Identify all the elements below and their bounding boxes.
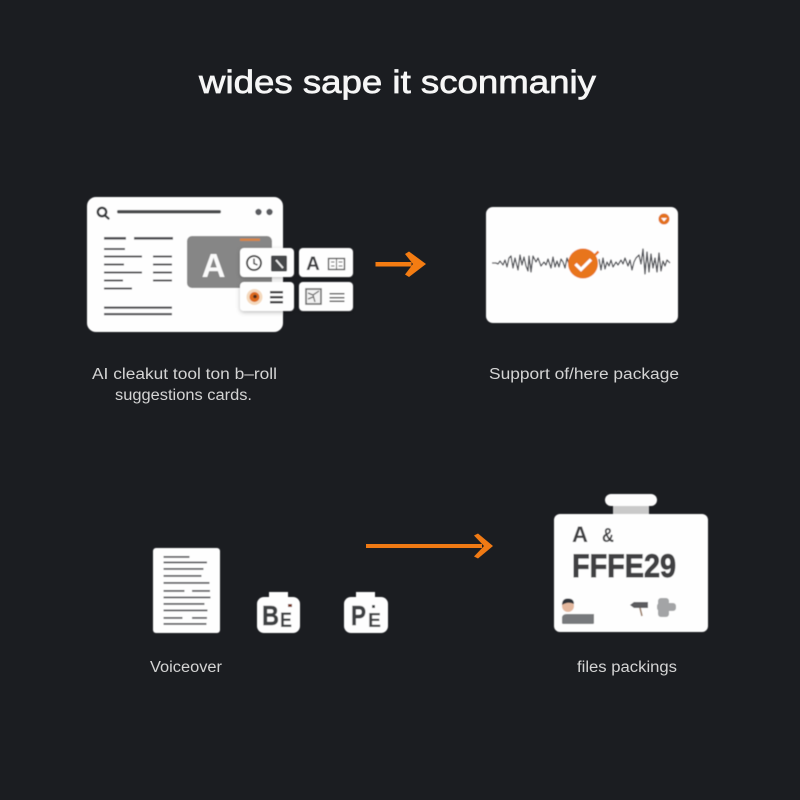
tag small letters: & (602, 525, 614, 547)
suggestion card: orange eye (240, 282, 294, 311)
icon: voiceover script document (153, 548, 220, 633)
panel: audio waveform card (486, 207, 678, 323)
tag handle (605, 494, 657, 506)
title: wides sape it sconmaniy (198, 64, 596, 100)
suggestion card: letter A (299, 248, 353, 277)
tag small letters (572, 522, 614, 547)
icon: file badge B: E (280, 609, 292, 632)
caption: b-roll tool: AI cleakut tool ton b–roll (92, 366, 277, 383)
icon: person (562, 598, 594, 624)
icon: file badge B: B (262, 600, 279, 631)
icon: file badge P: P (351, 600, 366, 631)
arrow: bottom (366, 534, 493, 558)
suggestion card: letter A: A (306, 254, 320, 275)
caption: files packings: files packings (577, 659, 677, 676)
caption: b-roll tool (92, 366, 277, 404)
browser card (87, 197, 283, 332)
image tile with letter A (187, 236, 272, 288)
arrow: top (376, 252, 426, 277)
icon: small orange badge (658, 214, 670, 224)
icon: search (98, 208, 108, 218)
icon: file badge P: E (368, 610, 381, 632)
address bar (117, 210, 221, 214)
icon: orange check (568, 248, 598, 278)
suggestion card: map (299, 282, 353, 311)
caption: voiceover: Voiceover (150, 659, 222, 676)
icon: hammer (630, 602, 648, 616)
tag code: FFFE29 (572, 548, 676, 584)
suggestion card: clock (240, 248, 294, 277)
tag small letters: A (572, 522, 588, 547)
tag neck (613, 504, 649, 515)
text lines (104, 237, 173, 315)
window dots (255, 209, 273, 215)
panel: file package tag (554, 494, 708, 632)
image tile with letter A: A (202, 247, 225, 284)
caption: support package: Support of/here package (489, 366, 679, 383)
panel: browser window with b-roll cards (87, 197, 353, 332)
icon: file badge P (344, 592, 388, 633)
caption: b-roll tool: suggestions cards. (115, 387, 252, 404)
waveform (492, 255, 569, 272)
tag body (554, 514, 708, 632)
icon: plus shape (657, 598, 676, 617)
icon: file badge B (257, 592, 300, 633)
